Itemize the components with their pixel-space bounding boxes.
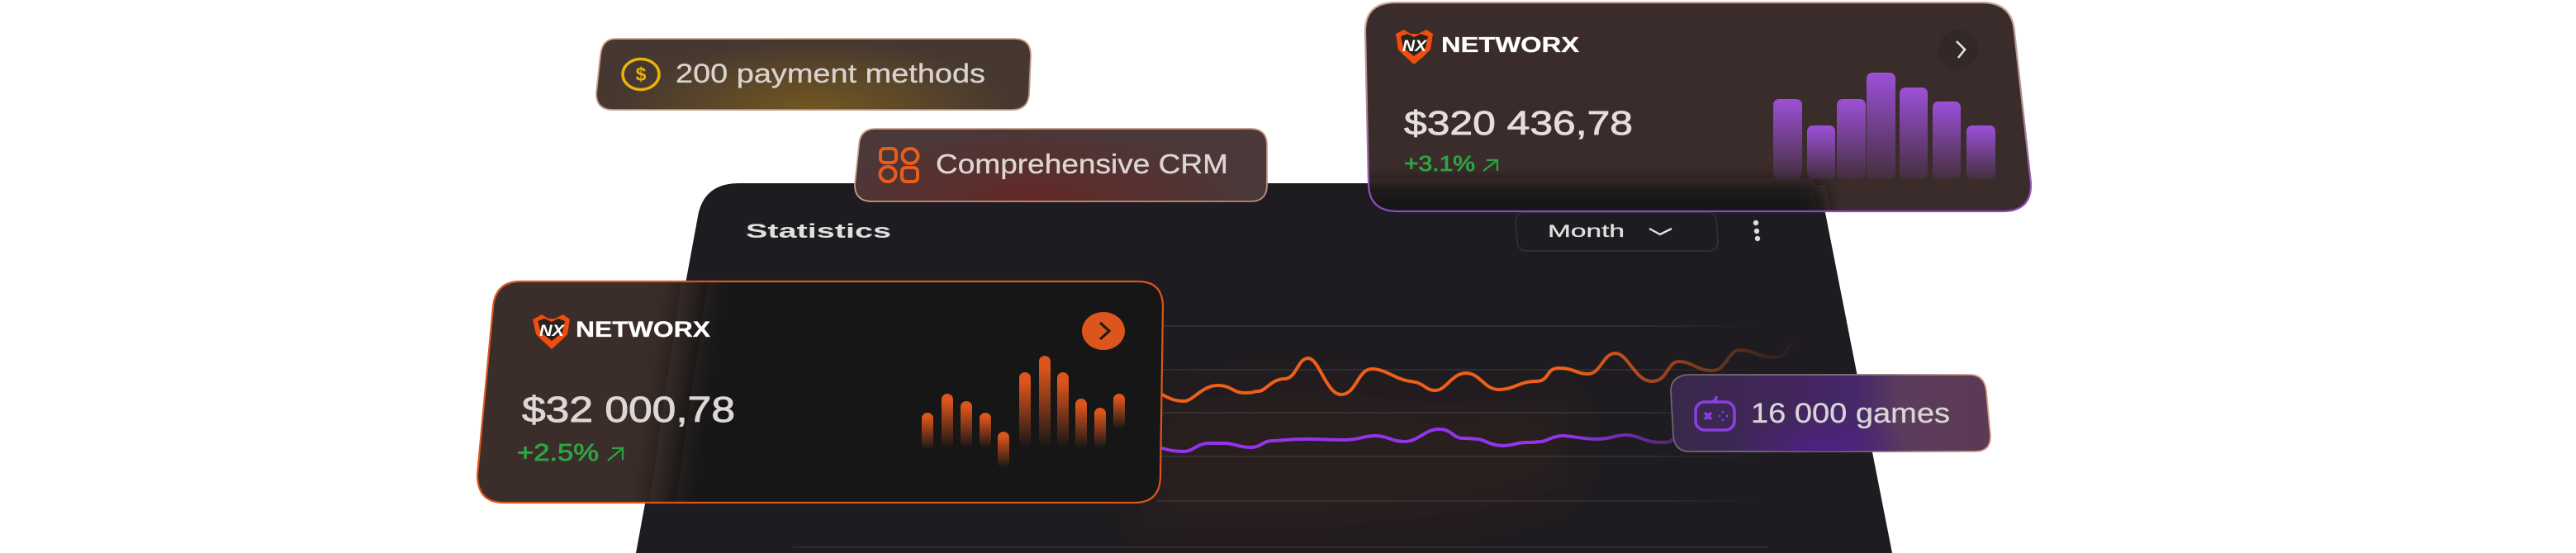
pill: 200 payment methods: 200 payment methods	[676, 59, 985, 88]
pill: Comprehensive CRM: Comprehensive CRM	[936, 149, 1228, 179]
card: networx purple	[1364, 2, 2032, 213]
chart area glow	[1140, 388, 1569, 528]
logo: networx: NETWORX	[576, 317, 710, 342]
icon: game controller	[1696, 396, 1734, 430]
change	[517, 440, 623, 466]
logo: networx	[533, 314, 710, 349]
bar chart: purple	[1773, 73, 1995, 179]
bar chart: orange	[922, 356, 1125, 468]
arrow button	[1082, 312, 1125, 350]
pill: Comprehensive CRM	[855, 129, 1267, 201]
arrow button	[1938, 30, 1978, 69]
amount: $32 000,78	[522, 390, 735, 430]
icon: CRM grid	[880, 149, 918, 182]
pill: 200 payment methods	[596, 39, 1031, 110]
change: +3.1%	[1404, 151, 1475, 176]
card: networx orange	[476, 281, 1165, 503]
change	[1404, 151, 1497, 176]
amount: $320 436,78	[1404, 104, 1633, 142]
panel: statistics dashboard	[636, 183, 1892, 553]
logo: networx: NX	[539, 323, 565, 340]
month dropdown	[1516, 212, 1718, 251]
change: +2.5%	[517, 440, 599, 466]
purple line	[1162, 429, 1673, 451]
icon: dollar coin	[623, 59, 659, 89]
icon: dollar coin: $	[636, 64, 647, 85]
logo: networx: NETWORX	[1441, 32, 1580, 57]
logo: networx: NX	[1402, 38, 1427, 55]
logo: networx	[1396, 30, 1580, 64]
pill: 16 000 games	[1671, 375, 1990, 451]
pill: 16 000 games: 16 000 games	[1751, 398, 1950, 429]
chart: revenue lines	[793, 326, 1792, 547]
heading: Statistics: Statistics	[746, 220, 891, 243]
month dropdown: Month	[1548, 222, 1625, 241]
orange line	[1162, 344, 1792, 401]
menu dots	[1753, 220, 1760, 241]
